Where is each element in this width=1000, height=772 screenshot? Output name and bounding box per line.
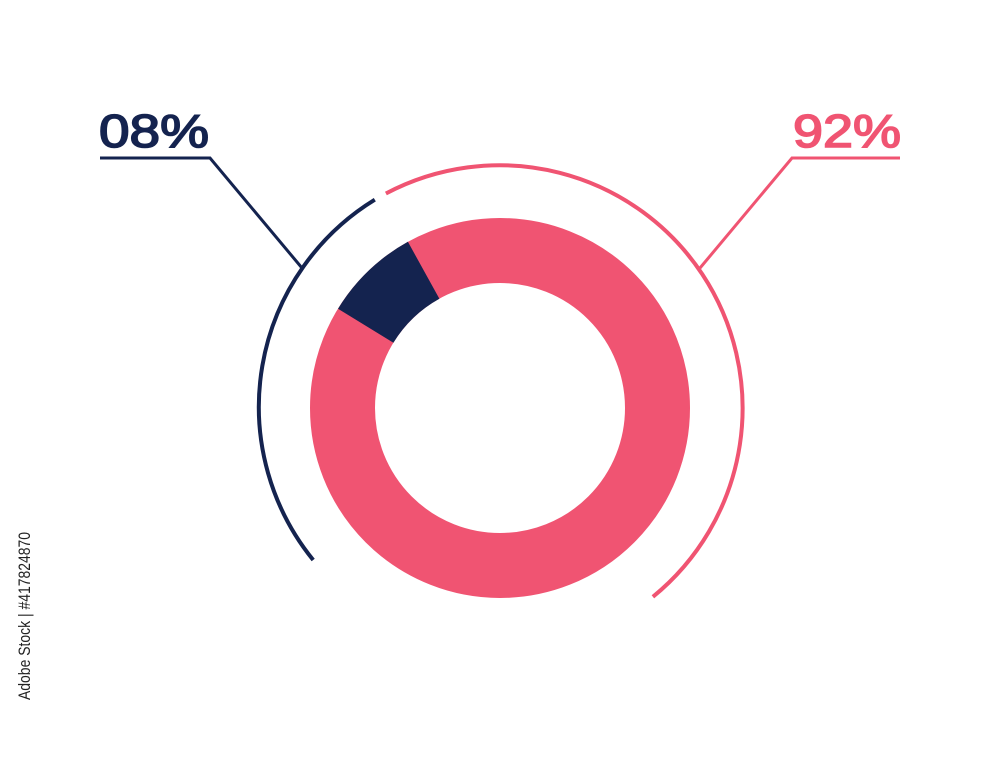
label: 92%: 92% [793,105,901,157]
outer arc: pink [386,165,743,597]
leader line: pink [700,158,900,268]
watermark id: Adobe Stock | #417824870 [15,532,34,700]
donut segment: 8% navy [338,242,439,343]
donut segment: 92% pink [342,250,658,566]
label: 08%: 08% [99,105,209,157]
donut chart [338,242,658,566]
leader line: navy [100,158,302,268]
outer arc: navy [259,200,375,560]
